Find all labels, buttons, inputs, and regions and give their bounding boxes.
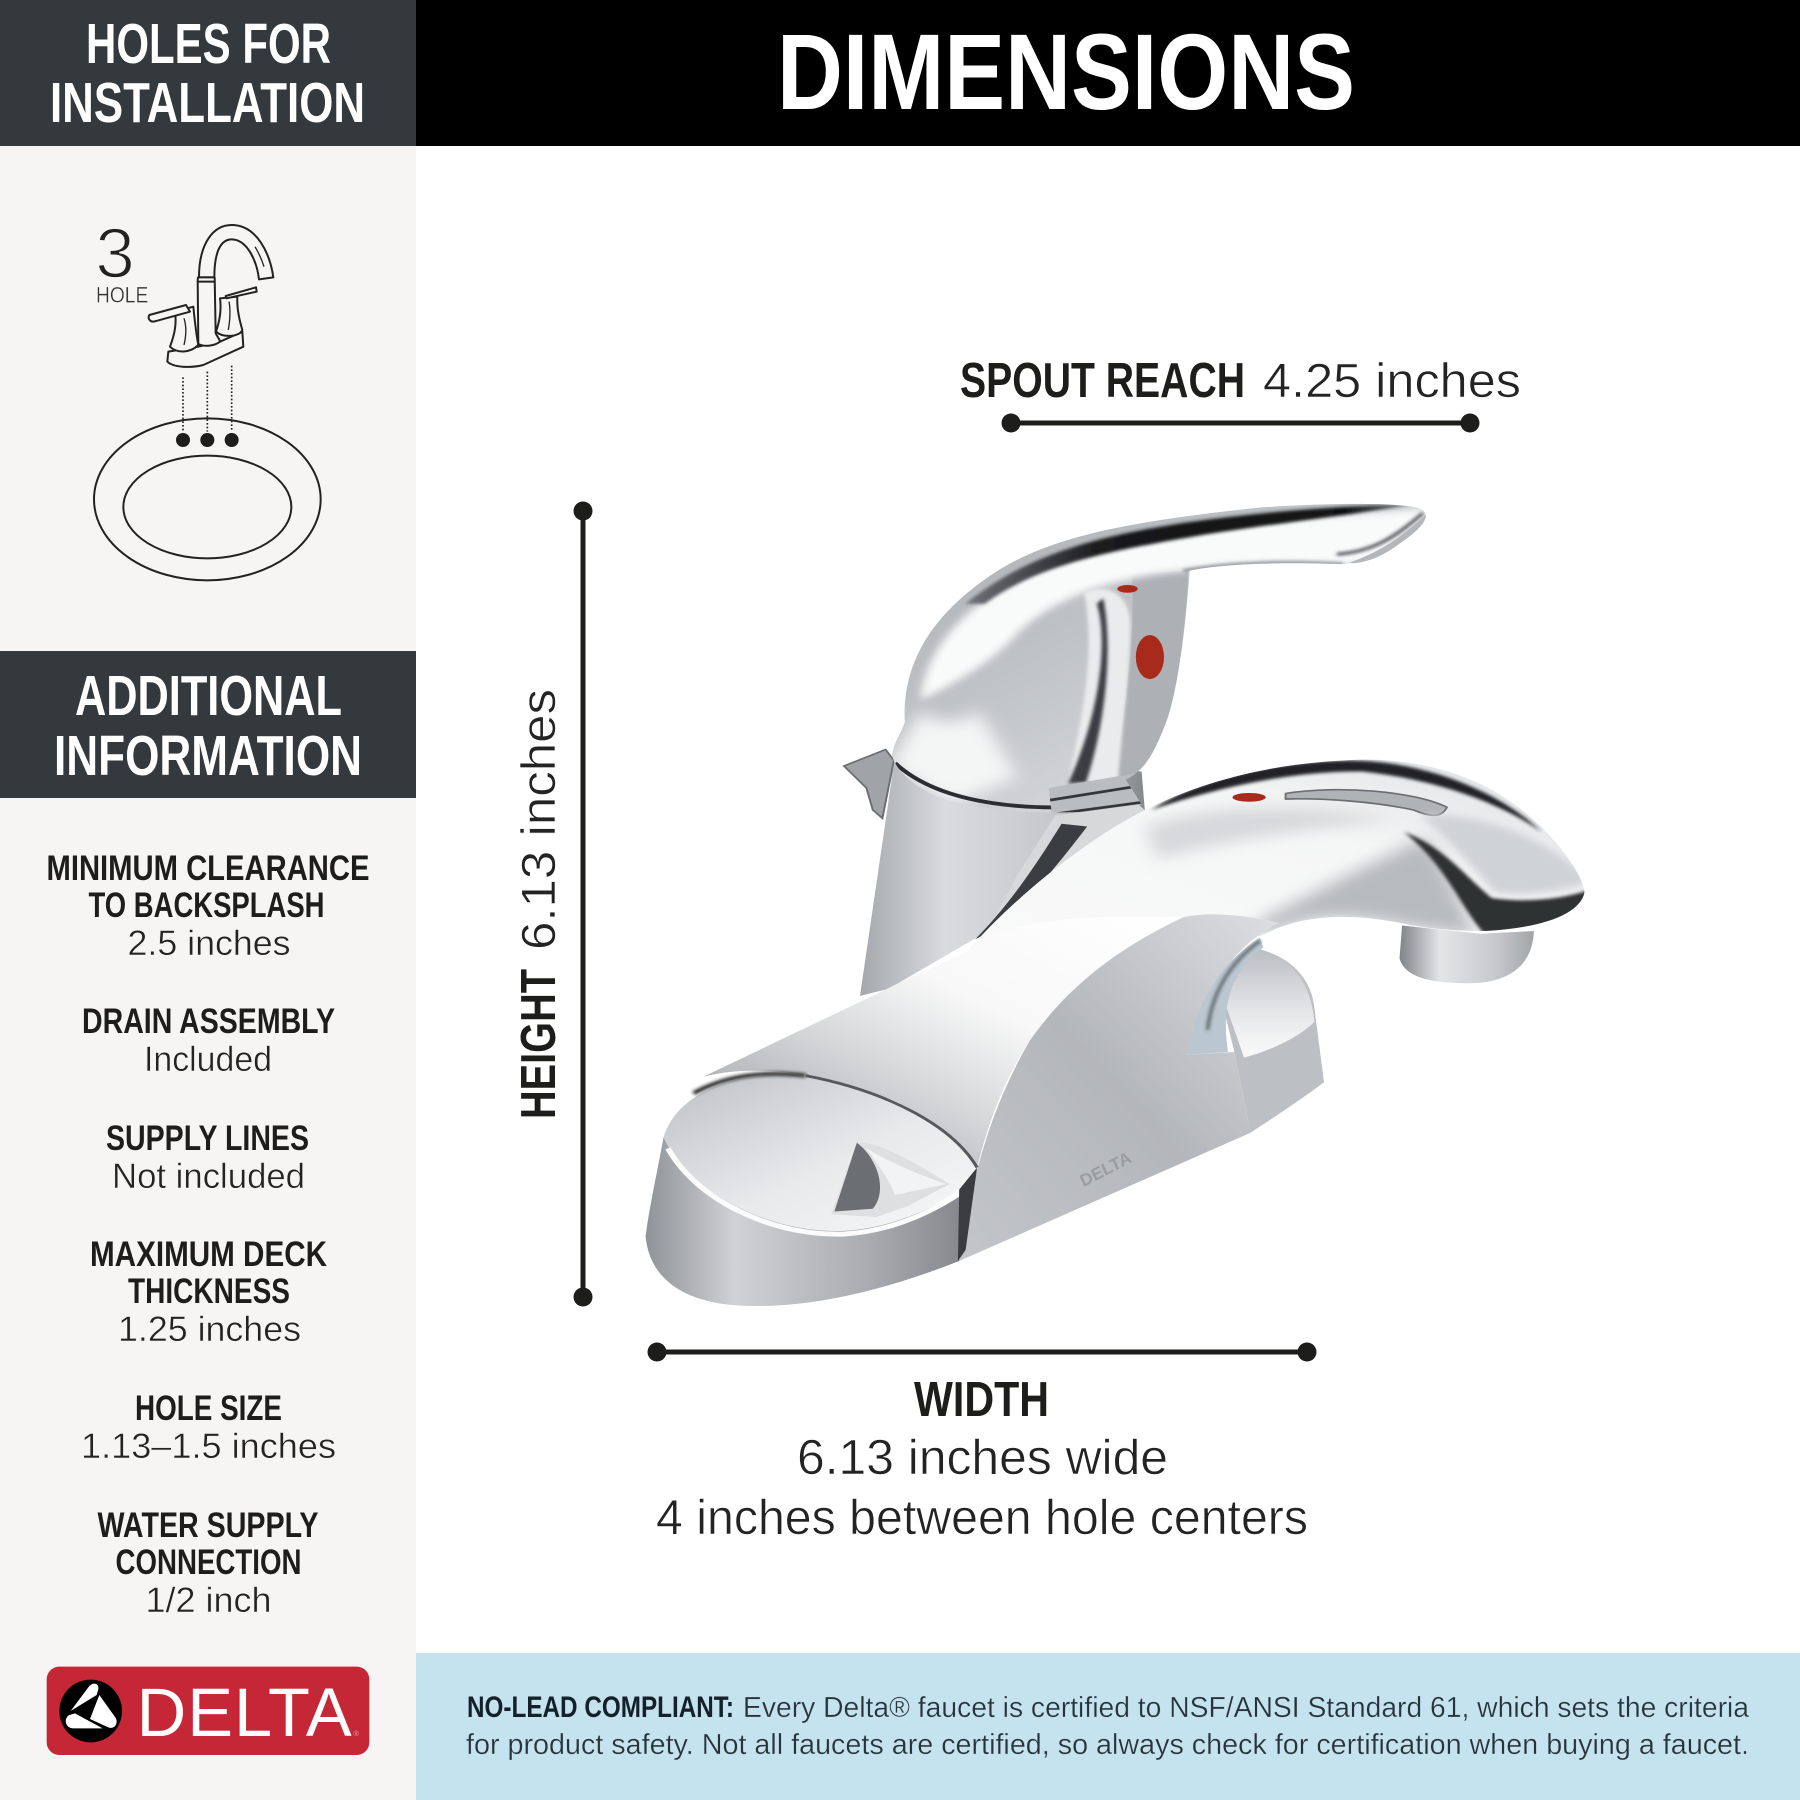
title: dimensions [416,0,1800,146]
spec: drain assembly [82,1002,335,1079]
neck [975,804,1161,948]
handle [892,504,1426,812]
label: width: WIDTH [914,1373,1049,1427]
deck top [703,917,1183,1168]
panel: no-lead compliance note [416,1653,1800,1800]
spec: maximum deck thickness: 1.25 inches [118,1310,301,1349]
spec: supply lines: SUPPLY LINES [106,1119,309,1158]
spec: minimum clearance: MINIMUM CLEARANCE [46,849,370,888]
panel: no-lead compliance note: for product safety. Not all faucets are certified, so always check for certification when buying a faucet. [466,1729,1749,1761]
spec: water supply connection: 1/2 inch [146,1581,272,1620]
spec: water supply connection [98,1506,318,1620]
back deck plate [1215,948,1324,1133]
label: width: 6.13 inches wide [797,1431,1168,1485]
deck cap [664,1074,977,1261]
spec: maximum deck thickness: THICKNESS [128,1272,290,1311]
lift rod [844,750,894,818]
spec: water supply connection: WATER SUPPLY [98,1506,318,1545]
spec: minimum clearance: 2.5 inches [128,924,290,963]
label: spout reach: SPOUT REACH [960,354,1245,408]
arrow: width dimension line [648,1342,1316,1362]
icon: 3 hole faucet and sink: 3 [95,213,135,292]
spec: maximum deck thickness: MAXIMUM DECK [90,1235,327,1274]
heading: holes for installation: HOLES FOR [86,12,331,76]
panel: no-lead compliance note: Every Delta® faucet is certified to NSF/ANSI Standard 61, which sets the criteria [743,1692,1750,1724]
heading: holes for installation [0,0,416,146]
spec: supply lines [106,1119,309,1196]
label: height: 6.13 inches [513,689,566,950]
heading: additional information: INFORMATION [54,724,362,788]
spec: water supply connection: CONNECTION [116,1543,302,1582]
spec: supply lines: Not included [112,1157,305,1196]
spec: drain assembly: Included [144,1040,272,1079]
label: spout reach: 4.25 inches [1263,355,1521,408]
body front face: DELTA [1075,1149,1136,1190]
icon: 3 hole faucet and sink [94,213,321,580]
logo: delta: ® [353,1729,359,1738]
spec: maximum deck thickness [90,1235,327,1349]
column [860,755,1145,996]
arrow: spout reach dimension line [1002,414,1480,432]
panel: no-lead compliance note: NO-LEAD COMPLIANT: [467,1691,734,1724]
deck notch [831,1143,950,1217]
label: width [656,1373,1308,1545]
aerator [1400,926,1534,983]
label: width: 4 inches between hole centers [656,1491,1308,1545]
panel: left sidebar [0,0,416,1800]
logo: delta: DELTA [137,1674,352,1751]
label: height: HEIGHT [512,969,566,1119]
label: height [512,689,566,1119]
heading: holes for installation: INSTALLATION [50,71,365,135]
spec: hole size [81,1389,336,1466]
spout [980,760,1584,942]
faucet illustration [646,496,1612,1306]
arrow: height dimension line [574,502,592,1306]
label: spout reach [960,354,1521,408]
heading: additional information [0,651,416,798]
spec: drain assembly: DRAIN ASSEMBLY [82,1002,335,1041]
spec: minimum clearance: TO BACKSPLASH [88,886,324,925]
heading: additional information: ADDITIONAL [75,664,342,728]
icon: 3 hole faucet and sink: HOLE [96,283,148,308]
spec: hole size: 1.13–1.5 inches [81,1427,336,1466]
spec: minimum clearance [46,849,370,963]
logo: delta [47,1667,369,1755]
spec: hole size: HOLE SIZE [135,1389,282,1428]
title: dimensions: DIMENSIONS [777,11,1355,132]
body front face [959,914,1279,1261]
deck side [646,1137,962,1306]
